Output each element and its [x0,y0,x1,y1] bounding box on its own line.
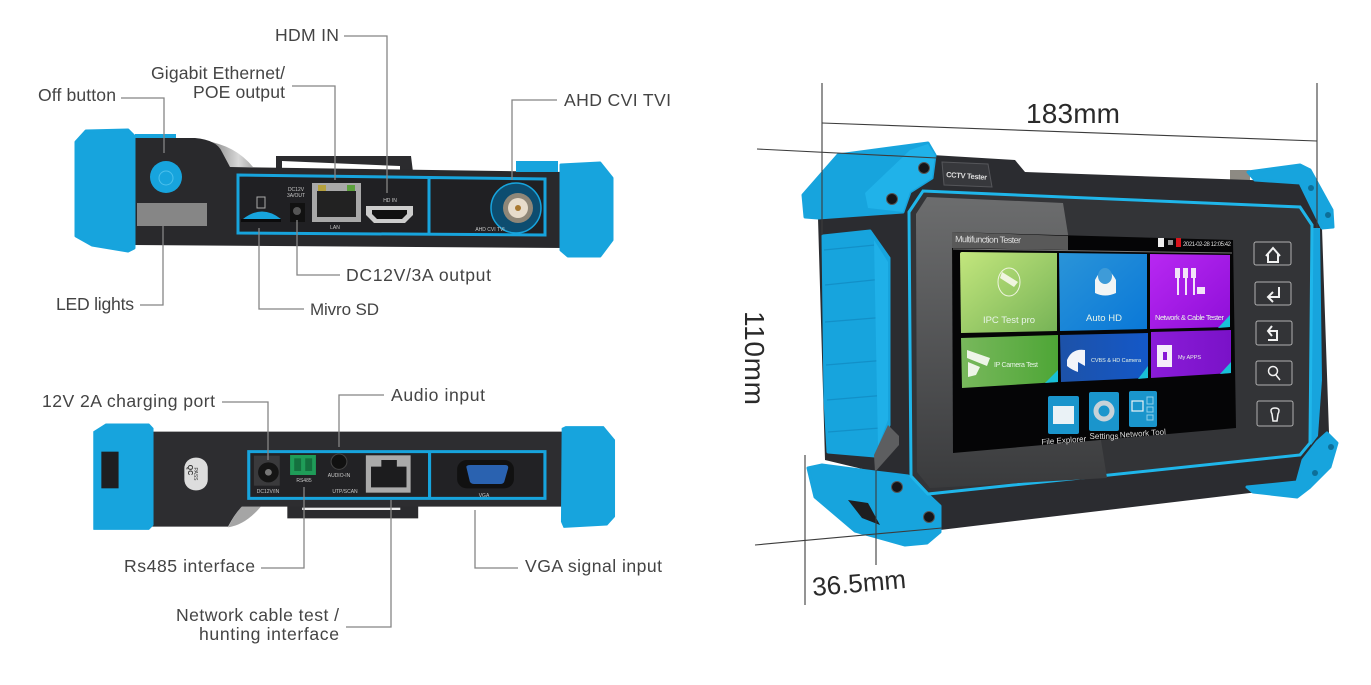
dimension lines [755,83,1317,605]
stand slot [302,508,400,510]
port print: bottom device: DC12V/IN [257,489,280,495]
micro SD slot [243,212,281,219]
screen text: 2021-02-28 12:05:42 [1183,242,1232,248]
callout lines [121,36,557,627]
callout labels: Rs485 interface [124,556,255,576]
left bumper [76,130,134,251]
light key [1257,401,1293,426]
dome camera icon [1095,268,1116,296]
callout labels: Audio input [391,385,485,405]
port print: bottom device: PASS [192,468,198,481]
top-left bumper facet [865,144,935,212]
left bumper opening [101,452,119,488]
body [152,432,562,527]
port print: top device: HD IN [383,198,397,204]
main device front view [803,143,1337,545]
callout labels: Network cable test / [176,605,339,625]
dimension: depth: 36.5mm [811,564,907,602]
enter key [1255,282,1291,305]
CCTV badge [942,162,992,187]
tile CVBS & HD Camera [1060,333,1148,382]
callout labels: hunting interface [199,624,339,644]
screen text: Multifunction Tester [955,234,1021,245]
callout labels: AHD CVI TVI [564,90,671,110]
device bottom view [94,424,615,529]
callout labels: Gigabit Ethernet/ [151,63,285,83]
screen text: CCTV Tester [946,170,987,182]
screws [886,162,1334,522]
screen text: IPC Test pro [983,315,1035,326]
side chamfer [874,425,899,472]
screen text: Auto HD [1086,313,1122,324]
body [818,155,1329,530]
tile Network & Cable Tester [1150,254,1230,329]
callout labels: 12V 2A charging port [42,391,215,411]
handle grip [823,231,889,456]
dimension: height: 110mm [739,311,770,405]
rear stand tab [276,156,413,172]
LED lights [137,203,207,226]
port print: top device: DC12V [288,187,305,193]
off button [150,161,182,193]
battery hump [228,507,261,527]
screen text: CVBS & HD Camera [1091,358,1142,364]
rear blue tab [516,161,558,172]
screen text [946,170,1232,447]
tile Auto HD [1059,253,1147,331]
device top view [76,130,612,256]
home key [1254,242,1291,265]
top-right bumper [1248,165,1333,228]
file explorer icon [1048,396,1079,434]
DC jack [254,456,280,486]
screen text: File Explorer [1041,434,1087,447]
IPC icon [998,268,1020,296]
RJ45 port [366,455,411,493]
power hump [205,141,253,167]
callout labels: DC12V/3A output [346,265,491,285]
network tool icon [1129,391,1157,427]
QC pass seal [184,458,208,490]
zoom key [1256,361,1292,385]
port print: top device: 3A/OUT [287,193,305,199]
VGA port [457,460,514,488]
callout labels: VGA signal input [525,556,662,576]
body [133,138,565,248]
RS485 terminal [290,455,316,475]
callout labels [38,25,671,644]
HDMI port [366,206,413,223]
callout labels: Mivro SD [310,300,379,319]
screen text: Settings [1090,432,1118,441]
port print: bottom device [186,465,490,499]
top connector [1230,170,1250,182]
right bumper [561,427,615,527]
screen text: My APPS [1178,355,1201,361]
port print: bottom device: RS485 [296,478,312,484]
micro SD icon [257,197,265,208]
IP camera icon [967,350,990,377]
network cables icon [1175,268,1205,295]
grip highlight [874,240,888,446]
tile IP Camera Test [961,335,1058,388]
right side strip [1311,228,1322,445]
BNC connector [491,183,541,233]
callout labels: Off button [38,85,116,105]
screen text: Network Tool [1120,427,1166,440]
screen text: IP Camera Test [994,362,1038,369]
tile counters [1045,315,1231,383]
port print: bottom device: VGA [479,493,490,499]
port print: top device: LAN [330,225,340,231]
screen text: Network & Cable Tester [1155,313,1224,322]
top-left bumper [803,143,935,218]
glass reflection [916,197,1107,488]
back key [1256,321,1292,345]
callout labels: HDM IN [275,25,339,45]
tile My APPS [1151,330,1231,378]
callout labels: LED lights [56,294,134,314]
LAN port [312,183,361,222]
apps icon [1157,345,1172,367]
screen frame [909,191,1312,494]
status icons [1158,238,1181,247]
port panel [238,175,545,235]
bottom-left bumper [808,465,940,545]
port panel [249,452,545,498]
settings icon [1089,392,1119,431]
bottom-right bumper [1247,433,1337,497]
callout labels: POE output [193,82,285,102]
left bumper [94,424,153,529]
bumper opening [848,500,880,525]
tile IPC Test pro [960,252,1057,333]
port print: bottom device: QC [186,465,193,475]
PTZ camera icon [1067,350,1085,372]
grip ridges [824,245,887,432]
right bumper [561,163,612,256]
port print: top device: AHD CVI TVI [475,227,505,233]
DC jack [290,203,305,222]
port print: bottom device: UTP/SCAN [332,489,358,495]
title bar [952,232,1068,250]
top edge blue strip [135,134,176,140]
rear stand tab [287,503,418,518]
port print: top device [287,187,505,233]
screen [952,232,1236,453]
dimension: width: 183mm [1026,98,1120,129]
audio jack [331,454,347,469]
port print: bottom device: AUDIO-IN [328,473,351,479]
